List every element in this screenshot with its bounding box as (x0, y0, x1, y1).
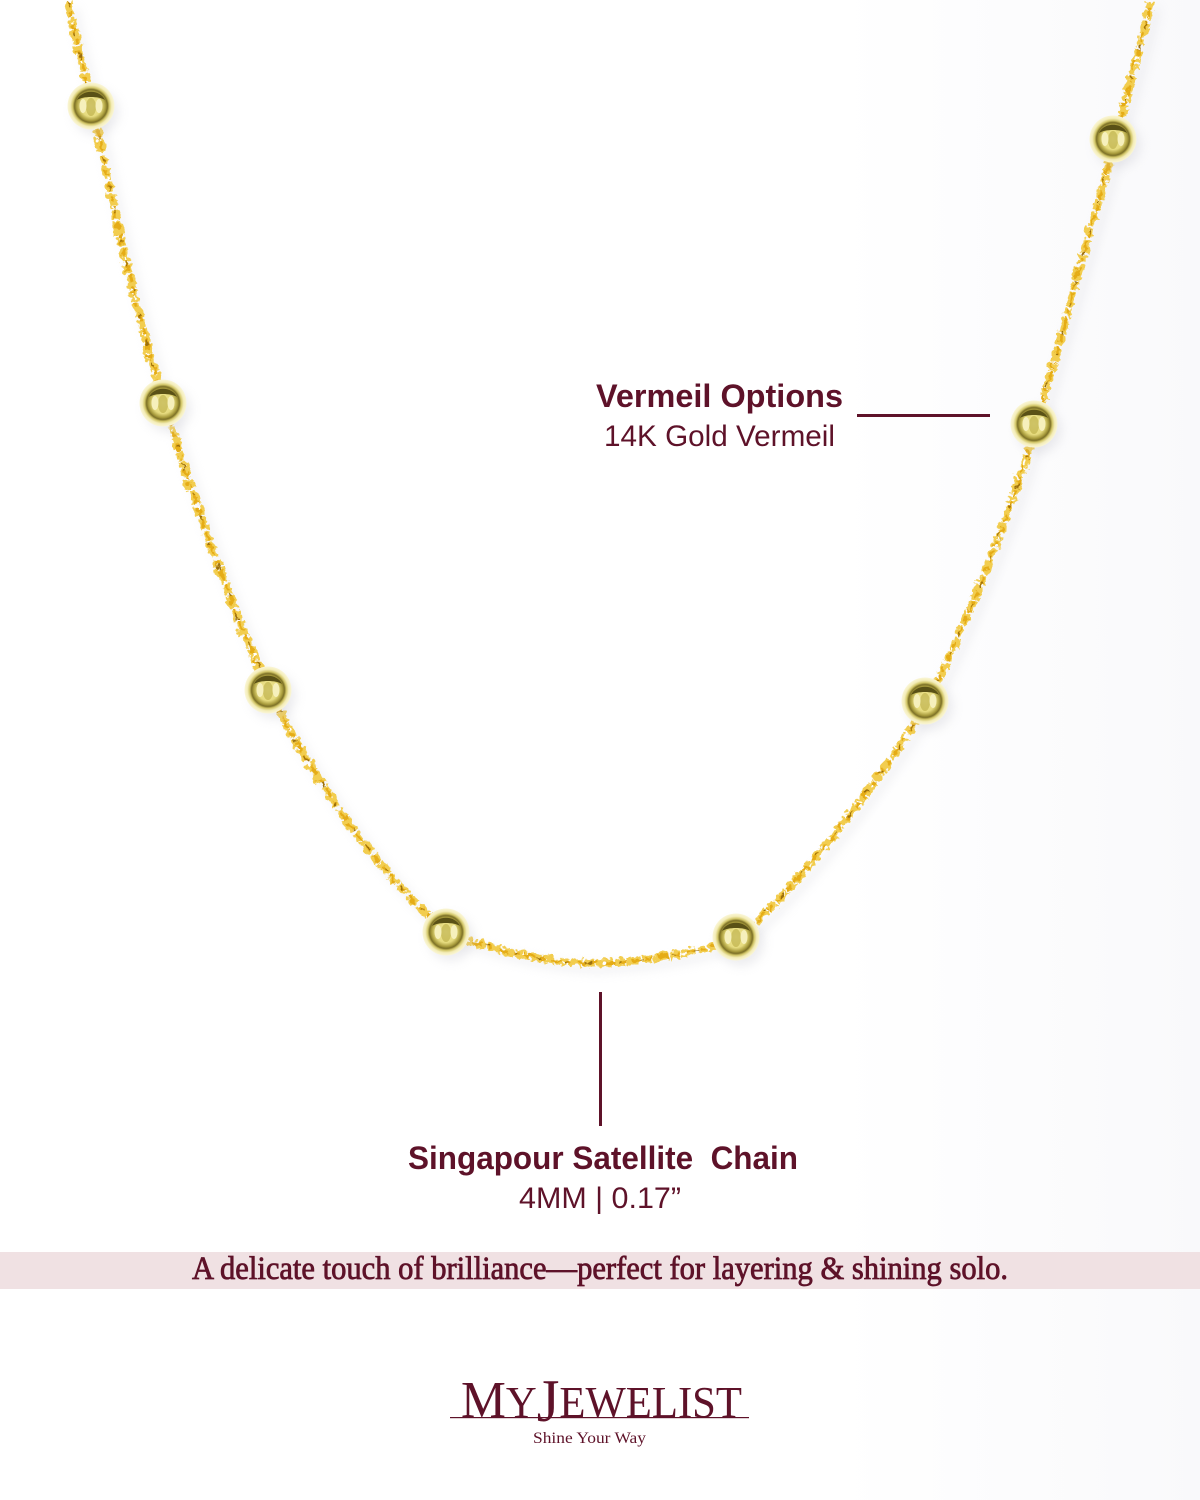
wordmark: MY (461, 1372, 538, 1429)
callout: chain (408, 992, 798, 1215)
heading: chain name: Singapour Satellite Chain (408, 1140, 798, 1176)
wordmark: EWELIST (559, 1378, 742, 1427)
callout: vermeil options (596, 378, 990, 453)
wordmark: J (537, 1368, 559, 1434)
logo tagline: Shine Your Way (533, 1430, 646, 1447)
leader line: vermeil (857, 414, 990, 417)
twisted chain (66, 0, 1148, 961)
logo (450, 1368, 749, 1447)
heading: vermeil options: Vermeil Options (596, 378, 843, 414)
chain shadow (74, 8, 1156, 969)
text: 14K gold vermeil: 14K Gold Vermeil (604, 420, 835, 453)
beads (68, 82, 1141, 966)
necklace (66, 0, 1156, 969)
tagline banner (0, 1251, 1200, 1289)
text: chain size: 4MM | 0.17” (519, 1182, 681, 1215)
tagline: A delicate touch of brilliance—perfect for layering & shining solo. (192, 1251, 1008, 1287)
leader line: chain (599, 992, 602, 1126)
